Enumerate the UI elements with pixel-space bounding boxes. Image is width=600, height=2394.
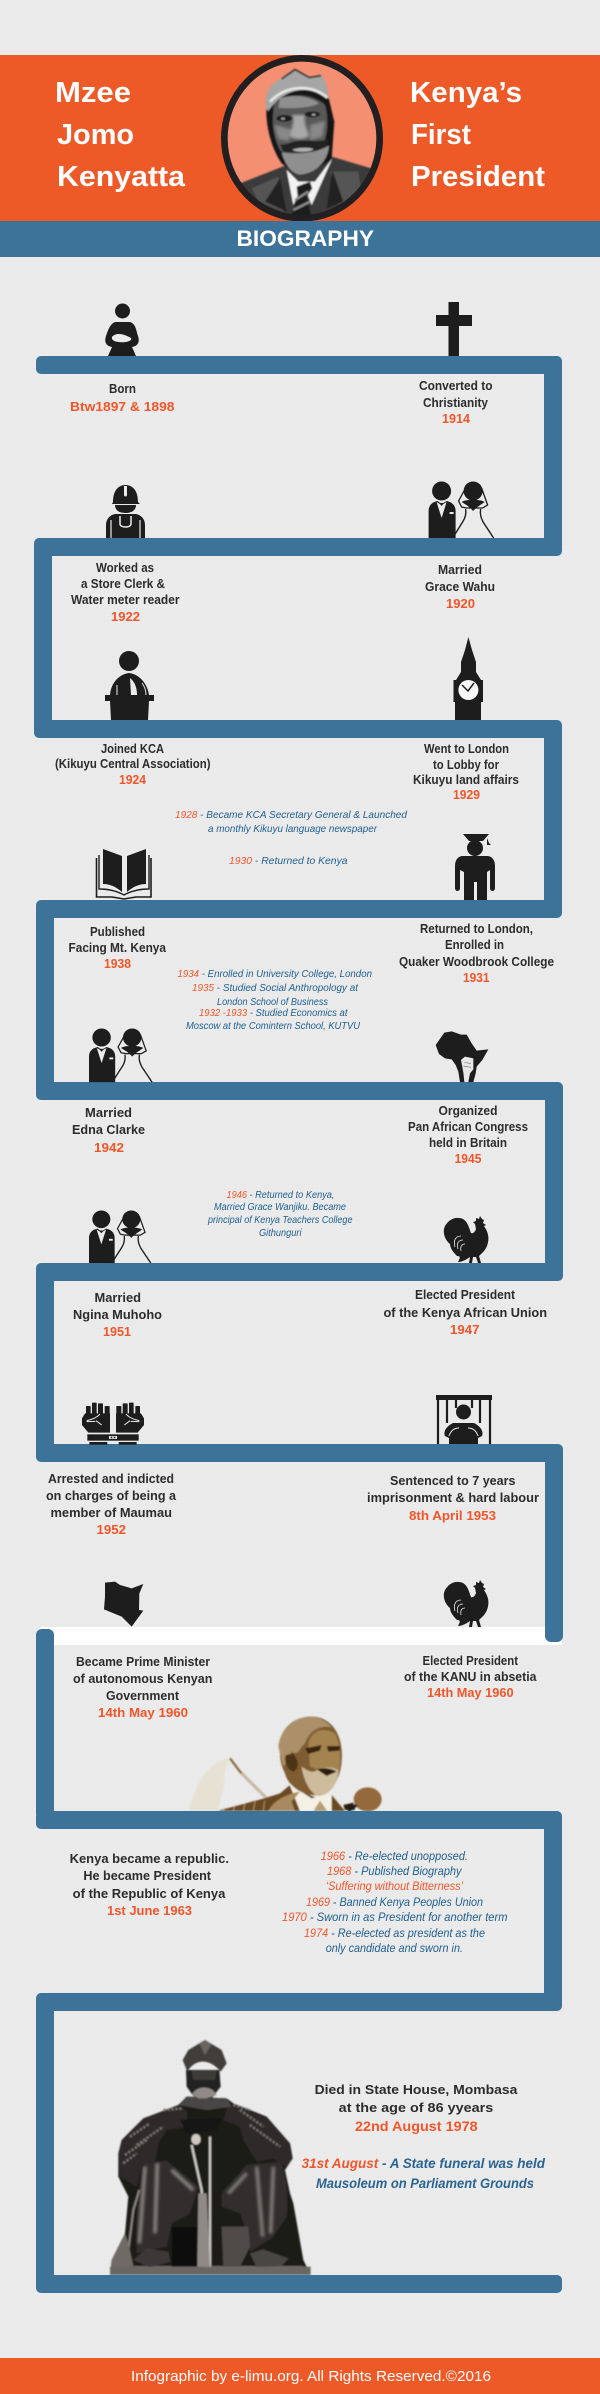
text: kanu president bbox=[404, 1654, 538, 1700]
text: pan african congress bbox=[408, 1104, 528, 1166]
header banner bbox=[0, 55, 600, 222]
title: Kenya's First President: Kenya’s bbox=[410, 77, 522, 109]
text: 1946 note: 1946 - Returned to Kenya, bbox=[226, 1189, 334, 1201]
text: pan african congress: Organized bbox=[438, 1104, 498, 1118]
text: store clerk: Worked as bbox=[96, 561, 154, 575]
text: store clerk: 1922 bbox=[111, 609, 140, 624]
title: Kenya's First President bbox=[410, 77, 545, 193]
text: 1932 to 1935 notes bbox=[178, 968, 372, 1032]
text: returned to london: Enrolled in bbox=[445, 938, 504, 952]
text: kanu president: 14th May 1960 bbox=[427, 1685, 514, 1700]
text: 1932 to 1935 notes: London School of Business bbox=[217, 996, 329, 1008]
text: store clerk: Water meter reader bbox=[71, 593, 180, 607]
text: married grace wahu: Grace Wahu bbox=[425, 580, 495, 594]
text: death in mombasa: 22nd August 1978 bbox=[355, 2118, 478, 2134]
footer bbox=[0, 2358, 600, 2394]
icon: mother holding baby bbox=[105, 304, 139, 356]
text: sentenced: imprisonment & hard labour bbox=[367, 1491, 539, 1505]
icon: handcuffed fists bbox=[82, 1403, 144, 1445]
text: 1928 and 1930 notes: 1930 - Returned to Kenya bbox=[229, 855, 348, 867]
text: born: Born bbox=[109, 382, 136, 396]
text: pan african congress: held in Britain bbox=[429, 1136, 507, 1150]
text: converted to christianity: 1914 bbox=[442, 411, 471, 426]
text: republic bbox=[70, 1852, 229, 1918]
text: returned to london: 1931 bbox=[463, 970, 490, 985]
icon: cross bbox=[436, 302, 472, 356]
text: went to london bbox=[413, 742, 519, 802]
text: went to london: Went to London bbox=[424, 742, 509, 756]
text: went to london: Kikuyu land affairs bbox=[413, 773, 519, 787]
text: death in mombasa: Died in State House, Mombasa bbox=[315, 2082, 518, 2097]
icon: rooster bbox=[444, 1216, 488, 1263]
text: arrested bbox=[46, 1472, 177, 1537]
text: state funeral: 31st August - A State funeral was held bbox=[302, 2156, 546, 2171]
photo: statue of Kenyatta seated bbox=[100, 2040, 320, 2280]
title: Kenya's First President: First bbox=[411, 119, 471, 151]
text: married grace wahu: Married bbox=[438, 563, 482, 577]
text: kanu president: Elected President bbox=[422, 1654, 519, 1668]
text: president of kau bbox=[384, 1288, 547, 1337]
text: 1966 to 1974 notes bbox=[282, 1849, 508, 1955]
text: went to london: 1929 bbox=[453, 787, 480, 802]
text: married grace wahu: 1920 bbox=[446, 596, 475, 611]
text: facing mt kenya: 1938 bbox=[104, 956, 131, 971]
text: prime minister: 14th May 1960 bbox=[98, 1705, 188, 1720]
text: republic: Kenya became a republic. bbox=[70, 1852, 229, 1866]
text: republic: 1st June 1963 bbox=[107, 1903, 192, 1918]
text: facing mt kenya: Published bbox=[90, 925, 145, 939]
text: 1966 to 1974 notes: only candidate and sworn in. bbox=[326, 1941, 463, 1955]
text: arrested: 1952 bbox=[96, 1522, 126, 1537]
icon: map of kenya bbox=[104, 1582, 143, 1627]
text: born: Btw1897 & 1898 bbox=[70, 399, 174, 414]
text: 1946 note bbox=[207, 1189, 353, 1239]
icon: wedding couple bbox=[429, 482, 494, 538]
text: sentenced: 8th April 1953 bbox=[409, 1508, 496, 1523]
text: prime minister: Government bbox=[106, 1689, 180, 1703]
portrait of Jomo Kenyatta bbox=[224, 58, 382, 222]
text: 1966 to 1974 notes: 1969 - Banned Kenya Peoples Union bbox=[306, 1895, 483, 1909]
biography heading band bbox=[0, 221, 600, 257]
text: 1966 to 1974 notes: 1966 - Re-elected unopposed. bbox=[321, 1849, 468, 1863]
text: arrested: member of Maumau bbox=[50, 1506, 172, 1520]
icon: wedding couple bbox=[89, 1210, 151, 1263]
text: joined kca: (Kikuyu Central Association) bbox=[55, 757, 210, 771]
text: prime minister bbox=[73, 1655, 212, 1720]
text: married edna clarke: Married bbox=[85, 1106, 132, 1120]
text: married edna clarke bbox=[72, 1106, 145, 1155]
text: 1932 to 1935 notes: 1934 - Enrolled in University College, London bbox=[178, 968, 372, 980]
text: married ngina muhoho bbox=[73, 1291, 162, 1339]
icon: rooster bbox=[444, 1580, 488, 1627]
text: joined kca bbox=[55, 742, 210, 787]
text: 1928 and 1930 notes: 1928 - Became KCA Secretary General & Launched bbox=[175, 809, 408, 821]
text: born bbox=[70, 382, 174, 414]
text: 1966 to 1974 notes: 1968 - Published Biography bbox=[327, 1864, 462, 1878]
text: married grace wahu bbox=[425, 563, 495, 611]
text: president of kau: 1947 bbox=[450, 1322, 480, 1337]
text: store clerk: a Store Clerk & bbox=[81, 577, 165, 591]
text: republic: He became President bbox=[83, 1869, 212, 1883]
icon: wedding couple bbox=[89, 1028, 152, 1082]
text: married ngina muhoho: Ngina Muhoho bbox=[73, 1308, 162, 1322]
text: sentenced: Sentenced to 7 years bbox=[390, 1474, 516, 1488]
text: facing mt kenya bbox=[68, 925, 167, 971]
text: married edna clarke: 1942 bbox=[94, 1140, 124, 1155]
text: kanu president: of the KANU in absetia bbox=[404, 1670, 538, 1684]
white band behind broken track segment bbox=[40, 1627, 562, 1645]
text: president of kau: Elected President bbox=[415, 1288, 516, 1302]
text: 1946 note: principal of Kenya Teachers College bbox=[207, 1214, 353, 1226]
footer: Infographic by e-limu.org. All Rights Reserved.©2016 bbox=[131, 2369, 491, 2385]
text: converted to christianity: Converted to bbox=[419, 379, 493, 393]
icon: graduate bbox=[455, 834, 495, 900]
timeline track bbox=[34, 356, 563, 2293]
text: converted to christianity: Christianity bbox=[423, 396, 488, 410]
icon: africa map with fist bbox=[436, 1031, 488, 1082]
text: republic: of the Republic of Kenya bbox=[73, 1887, 226, 1901]
text: 1932 to 1935 notes: 1935 - Studied Social Anthropology at bbox=[192, 982, 359, 994]
biography heading band: BIOGRAPHY bbox=[236, 226, 374, 251]
icon: speaker at podium bbox=[105, 651, 154, 720]
text: sentenced bbox=[367, 1474, 539, 1523]
icon: big ben tower bbox=[454, 637, 483, 720]
title: Mzee Jomo Kenyatta: Kenyatta bbox=[57, 161, 186, 193]
title: Mzee Jomo Kenyatta bbox=[55, 77, 186, 193]
text: joined kca: 1924 bbox=[119, 772, 147, 787]
text: returned to london: Returned to London, bbox=[420, 922, 533, 936]
text: arrested: Arrested and indicted bbox=[48, 1472, 174, 1486]
text: pan african congress: 1945 bbox=[455, 1151, 481, 1166]
icon: worker with hard hat bbox=[106, 485, 145, 538]
text: death in mombasa bbox=[315, 2082, 518, 2134]
text: 1966 to 1974 notes: 1974 - Re-elected as president as the bbox=[304, 1926, 485, 1940]
text: 1928 and 1930 notes: a monthly Kikuyu language newspaper bbox=[208, 823, 377, 835]
text: 1966 to 1974 notes: 1970 - Sworn in as President for another term bbox=[282, 1910, 508, 1924]
photo: Kenyatta speaking, holding fly whisk bbox=[180, 1717, 393, 1816]
text: went to london: to Lobby for bbox=[433, 758, 499, 772]
text: prime minister: Became Prime Minister bbox=[76, 1655, 210, 1669]
text: 1946 note: Married Grace Wanjiku. Became bbox=[214, 1201, 346, 1213]
text: 1966 to 1974 notes: ‘Suffering without Bitterness’ bbox=[326, 1879, 463, 1893]
text: married ngina muhoho: 1951 bbox=[103, 1324, 131, 1339]
text: facing mt kenya: Facing Mt. Kenya bbox=[68, 941, 167, 955]
text: store clerk bbox=[71, 561, 180, 624]
icon: open book bbox=[96, 849, 151, 899]
text: pan african congress: Pan African Congress bbox=[408, 1120, 528, 1134]
text: returned to london bbox=[399, 922, 554, 985]
title: Mzee Jomo Kenyatta: Jomo bbox=[57, 119, 134, 151]
text: prime minister: of autonomous Kenyan bbox=[73, 1672, 212, 1686]
text: 1932 to 1935 notes: 1932 -1933 - Studied Economics at bbox=[199, 1007, 348, 1019]
text: joined kca: Joined KCA bbox=[101, 742, 164, 756]
title: Kenya's First President: President bbox=[411, 161, 545, 193]
text: 1946 note: Githunguri bbox=[259, 1227, 302, 1239]
text: 1932 to 1935 notes: Moscow at the Comintern School, KUTVU bbox=[186, 1020, 360, 1032]
icon: prisoner behind bars bbox=[436, 1395, 492, 1444]
text: arrested: on charges of being a bbox=[46, 1489, 177, 1503]
text: returned to london: Quaker Woodbrook College bbox=[399, 955, 554, 969]
text: converted to christianity bbox=[419, 379, 493, 426]
text: state funeral bbox=[302, 2156, 546, 2191]
text: state funeral: Mausoleum on Parliament Grounds bbox=[316, 2176, 534, 2191]
text: married ngina muhoho: Married bbox=[94, 1291, 141, 1305]
text: death in mombasa: at the age of 86 yyears bbox=[339, 2100, 493, 2115]
text: 1928 and 1930 notes bbox=[175, 809, 408, 867]
text: president of kau: of the Kenya African Union bbox=[384, 1306, 547, 1320]
text: married edna clarke: Edna Clarke bbox=[72, 1123, 145, 1137]
title: Mzee Jomo Kenyatta: Mzee bbox=[55, 77, 131, 109]
